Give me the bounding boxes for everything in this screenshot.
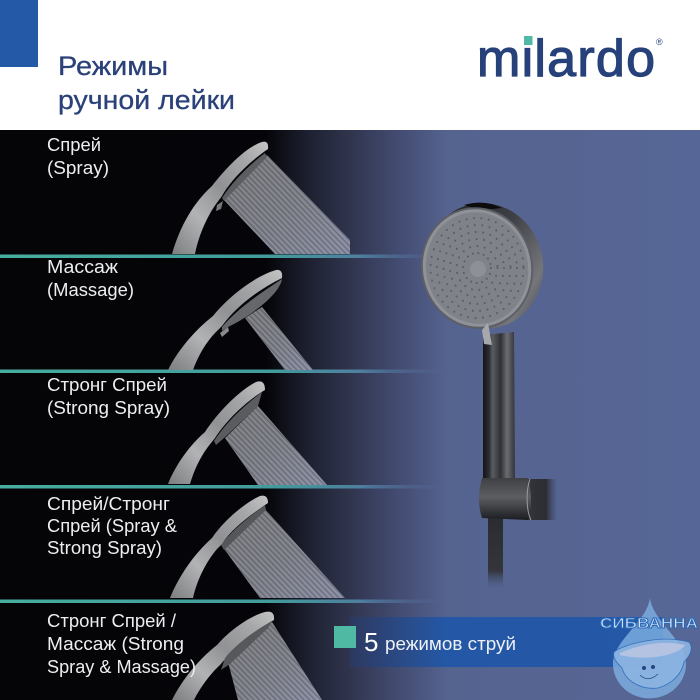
label: massage (47, 257, 134, 300)
shower panel: strong spray and massage (172, 612, 322, 700)
label: spray and strong spray (47, 494, 177, 558)
callout: 5 modes: режимов струй (385, 634, 516, 654)
shower panel: massage (168, 270, 313, 370)
wall bar (525, 479, 557, 520)
callout text: 5 (364, 627, 378, 657)
handle (483, 332, 515, 478)
label: massage: (Massage) (47, 280, 134, 300)
label: spray and strong spray: Спрей/Стронг (47, 494, 170, 514)
nozzle dots (430, 218, 524, 318)
white header (0, 0, 700, 130)
label: spray: (Spray) (47, 158, 109, 178)
teal square (334, 626, 356, 648)
label: strong spray and massage: Стронг Спрей / (47, 611, 176, 631)
shower panel: spray and strong spray (170, 496, 345, 598)
shower panel: strong spray (168, 381, 327, 485)
divider lines (0, 254, 450, 603)
label: spray (47, 135, 109, 178)
head face (411, 198, 543, 338)
label: massage: Массаж (47, 257, 118, 277)
label: strong spray: (Strong Spray) (47, 398, 170, 418)
holder clamp (479, 478, 531, 520)
shower panel: spray (172, 142, 350, 254)
logo: milardo: ® (656, 37, 663, 47)
head back rim (413, 192, 555, 340)
label: strong spray: Стронг Спрей (47, 375, 167, 395)
label: strong spray and massage (47, 611, 196, 677)
title: Режимы (58, 51, 168, 81)
mode switch tab (482, 323, 492, 345)
watermark: Sibvanna: СИБВАННА (600, 615, 698, 632)
label: strong spray and massage: Spray & Massage) (47, 657, 196, 677)
callout band (350, 617, 663, 667)
blue corner square (0, 0, 38, 67)
watermark: Sibvanna (600, 598, 698, 698)
label: spray and strong spray: Strong Spray) (47, 538, 162, 558)
logo: milardo: milardo (477, 30, 655, 88)
label: spray: Спрей (47, 135, 101, 155)
central button (470, 261, 486, 277)
callout: 5 modes (334, 617, 663, 667)
main hand shower product (411, 192, 557, 588)
label: spray and strong spray: Спрей (Spray & (47, 516, 177, 536)
label: strong spray and massage: Массаж (Strong (47, 634, 184, 654)
hose (488, 518, 503, 588)
title second line: ручной лейки (58, 85, 235, 115)
label: strong spray (47, 375, 170, 418)
